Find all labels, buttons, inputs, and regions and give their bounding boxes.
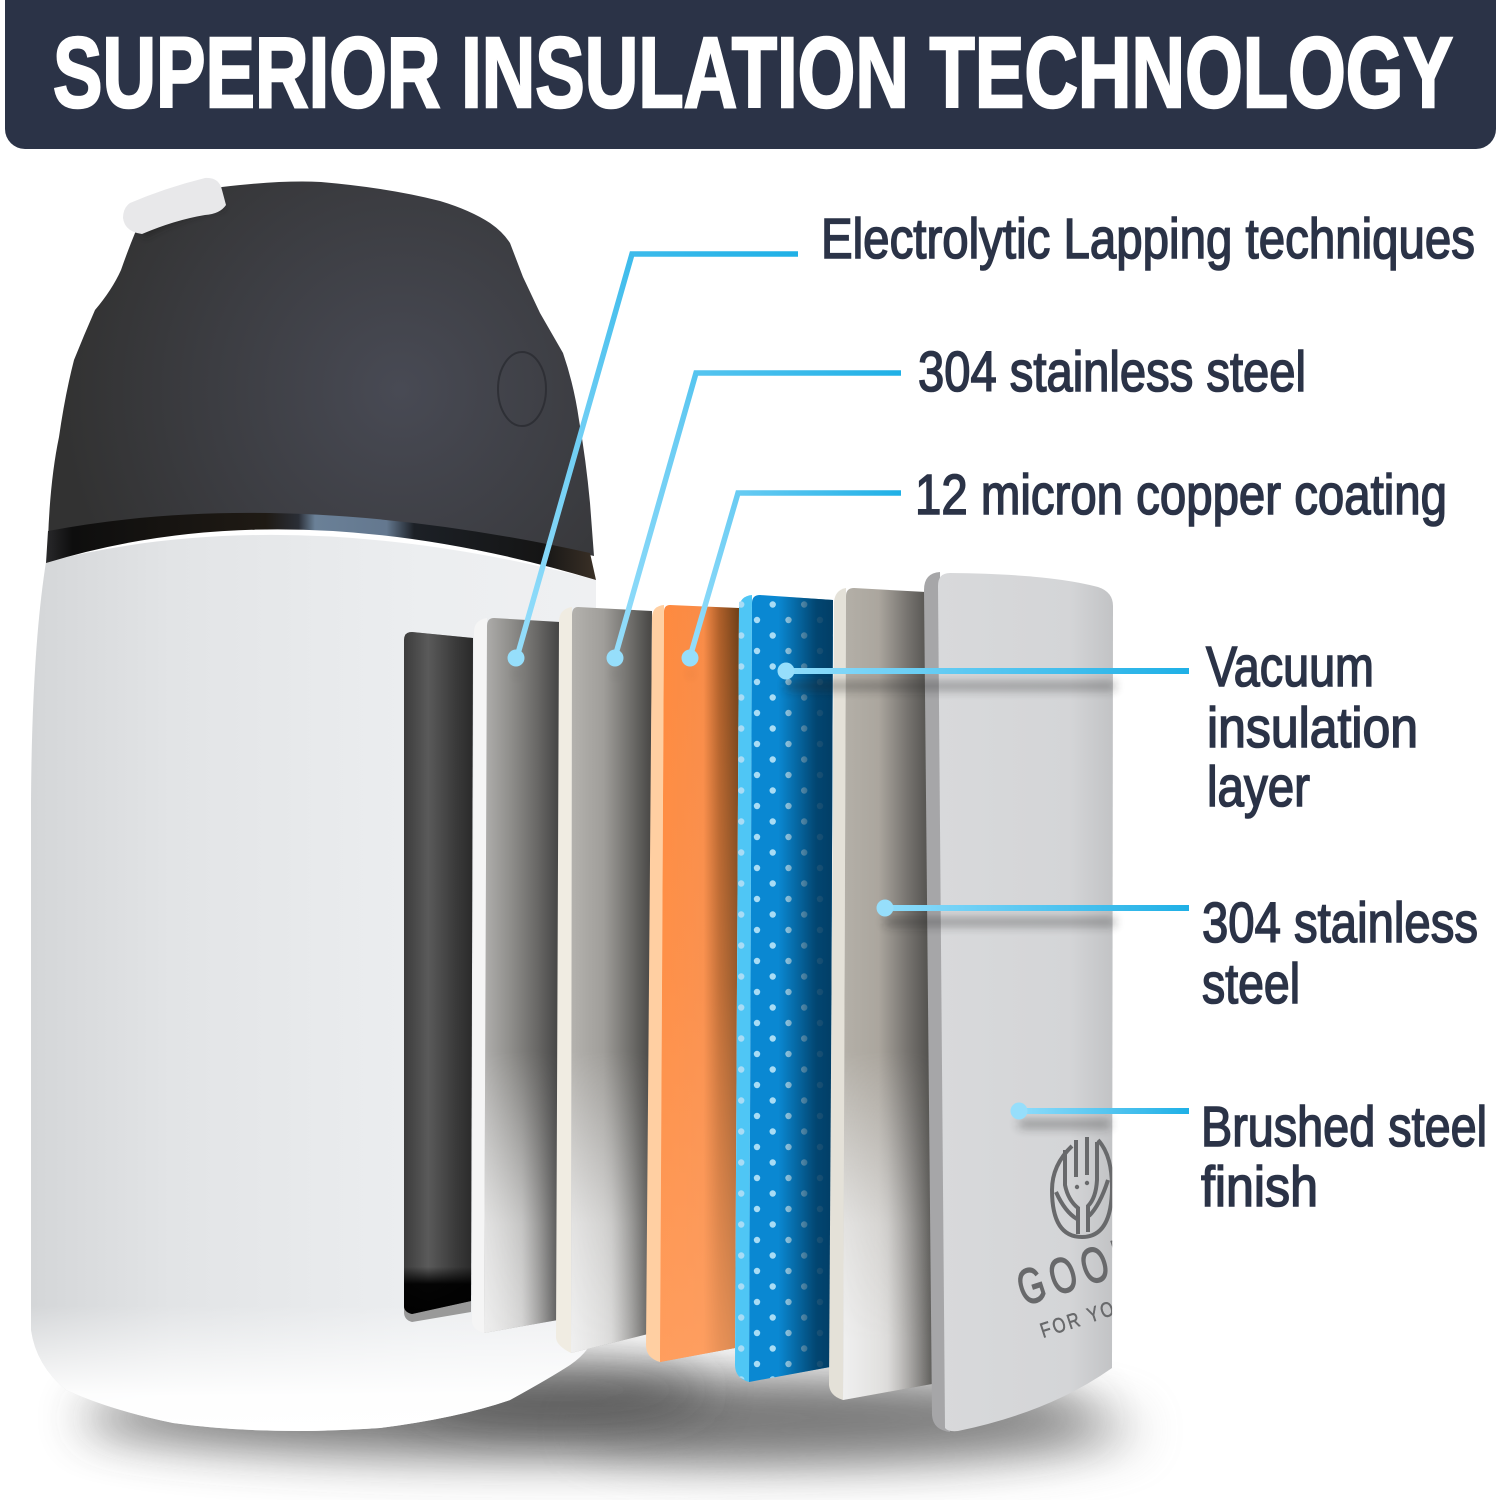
label: 304 stainless steel lower: steel: [1202, 952, 1300, 1016]
layer 5: outer steel: [829, 588, 932, 1400]
leader line: Electrolytic Lapping: [508, 254, 798, 666]
floor shadow: [80, 1360, 1140, 1464]
lid tab: [123, 178, 226, 238]
label: Brushed steel finish: finish: [1201, 1155, 1318, 1219]
label: Vacuum insulation layer: layer: [1207, 755, 1310, 819]
leader line: 304 stainless steel top: [606, 373, 901, 666]
leader line: 304 stainless steel lower: [876, 900, 1189, 916]
metal band: [46, 513, 596, 580]
leader line: vacuum layer: [778, 662, 1189, 680]
label: 304 stainless steel: 304 stainless steel: [918, 340, 1306, 404]
logo fork icon: [1052, 1137, 1112, 1237]
bottle body: [31, 535, 596, 1431]
layer 3: copper coating: [646, 605, 739, 1362]
layer 4: vacuum insulation: [735, 595, 833, 1382]
layer 1: inner steel: [472, 618, 560, 1333]
bottle: [31, 178, 596, 1431]
brand logo: [1018, 1137, 1112, 1338]
label: 304 stainless steel lower: [1202, 891, 1478, 1016]
cutaway window: [404, 632, 473, 1322]
logo wordmark: FOR YOU: [1038, 1292, 1133, 1343]
leader line: copper coating: [682, 493, 901, 666]
label: Vacuum insulation layer: Vacuum: [1206, 635, 1374, 699]
label: Brushed steel finish: [1201, 1095, 1487, 1219]
logo wordmark: [1018, 1240, 1112, 1338]
leader line: brushed steel: [1010, 1102, 1189, 1120]
title banner: [5, 0, 1496, 149]
logo wordmark: GOOD: [1010, 1223, 1152, 1317]
label: Vacuum insulation layer: [1206, 635, 1418, 819]
layer 2: 304 stainless steel: [556, 607, 652, 1353]
lid: [48, 182, 594, 556]
leader line shadows: [516, 674, 1115, 1124]
lid button: [498, 352, 546, 426]
label: Vacuum insulation layer: insulation: [1207, 696, 1418, 760]
layer 6: brushed steel finish: [924, 572, 1113, 1432]
